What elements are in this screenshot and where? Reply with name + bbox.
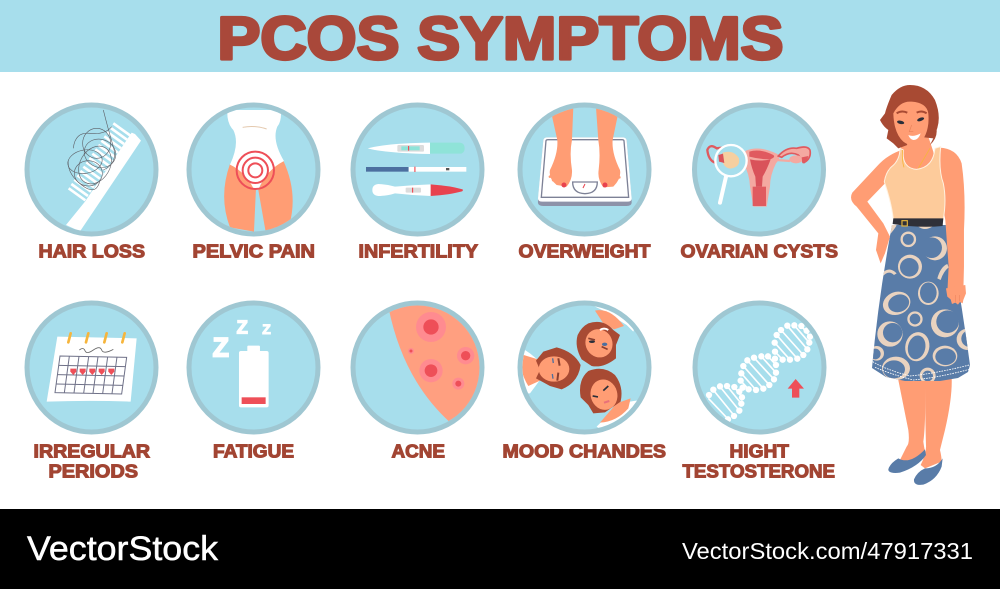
icon: skin with pimples xyxy=(389,303,483,422)
icon: pregnancy tests xyxy=(366,143,466,196)
icon: dna helix and arrow xyxy=(706,322,813,422)
footer url: VectorStock.com/47917331 xyxy=(682,538,973,564)
panel: acne xyxy=(353,303,483,462)
face: top xyxy=(577,322,620,366)
icon: calendar xyxy=(47,333,137,402)
panel: infertility xyxy=(353,105,482,262)
skirt pattern xyxy=(872,225,970,381)
label: HIGHT xyxy=(730,440,790,462)
panel: mood changes xyxy=(502,300,666,462)
label: PELVIC PAIN xyxy=(192,240,315,262)
icon: comb with hair xyxy=(66,110,141,231)
label xyxy=(682,440,835,482)
label: HAIR LOSS xyxy=(38,240,145,262)
icon: z letters and low battery: Z xyxy=(213,333,229,363)
right hand xyxy=(946,285,966,305)
icon: uterus with magnifier xyxy=(707,145,810,207)
icon: three faces xyxy=(522,306,637,428)
label: TESTOSTERONE xyxy=(682,460,835,482)
panel: ovarian cysts xyxy=(680,105,838,262)
panel: hair loss xyxy=(27,105,156,262)
title: PCOS SYMPTOMS xyxy=(218,5,784,72)
icon: z letters and low battery xyxy=(213,316,271,407)
label: OVARIAN CYSTS xyxy=(680,240,838,262)
icon: z letters and low battery: Z xyxy=(237,316,248,337)
label xyxy=(34,440,150,482)
header band xyxy=(0,0,1000,72)
panel: pelvic pain xyxy=(189,105,318,262)
label: FATIGUE xyxy=(213,440,294,462)
label: IRREGULAR xyxy=(34,440,150,462)
label: OVERWEIGHT xyxy=(518,240,651,262)
label: ACNE xyxy=(392,440,445,462)
face: left xyxy=(536,347,581,389)
panel: overweight xyxy=(518,105,651,262)
label: INFERTILITY xyxy=(358,240,479,262)
icon: z letters and low battery: Z xyxy=(262,321,271,337)
icon: pelvis with target xyxy=(224,110,293,232)
skirt xyxy=(872,225,970,381)
label: MOOD CHANDES xyxy=(502,440,666,462)
panel: fatigue xyxy=(189,303,318,462)
legs and shoes xyxy=(888,375,952,485)
upper body xyxy=(851,85,965,293)
footer logo: VectorStock xyxy=(27,530,219,568)
panel: high testosterone xyxy=(682,303,835,482)
label: PERIODS xyxy=(48,460,138,482)
illustration: woman xyxy=(851,85,978,485)
footer band xyxy=(0,509,1000,589)
face: bottom xyxy=(580,369,622,413)
panel: irregular periods xyxy=(27,303,156,482)
icon: feet on scale xyxy=(538,107,632,206)
